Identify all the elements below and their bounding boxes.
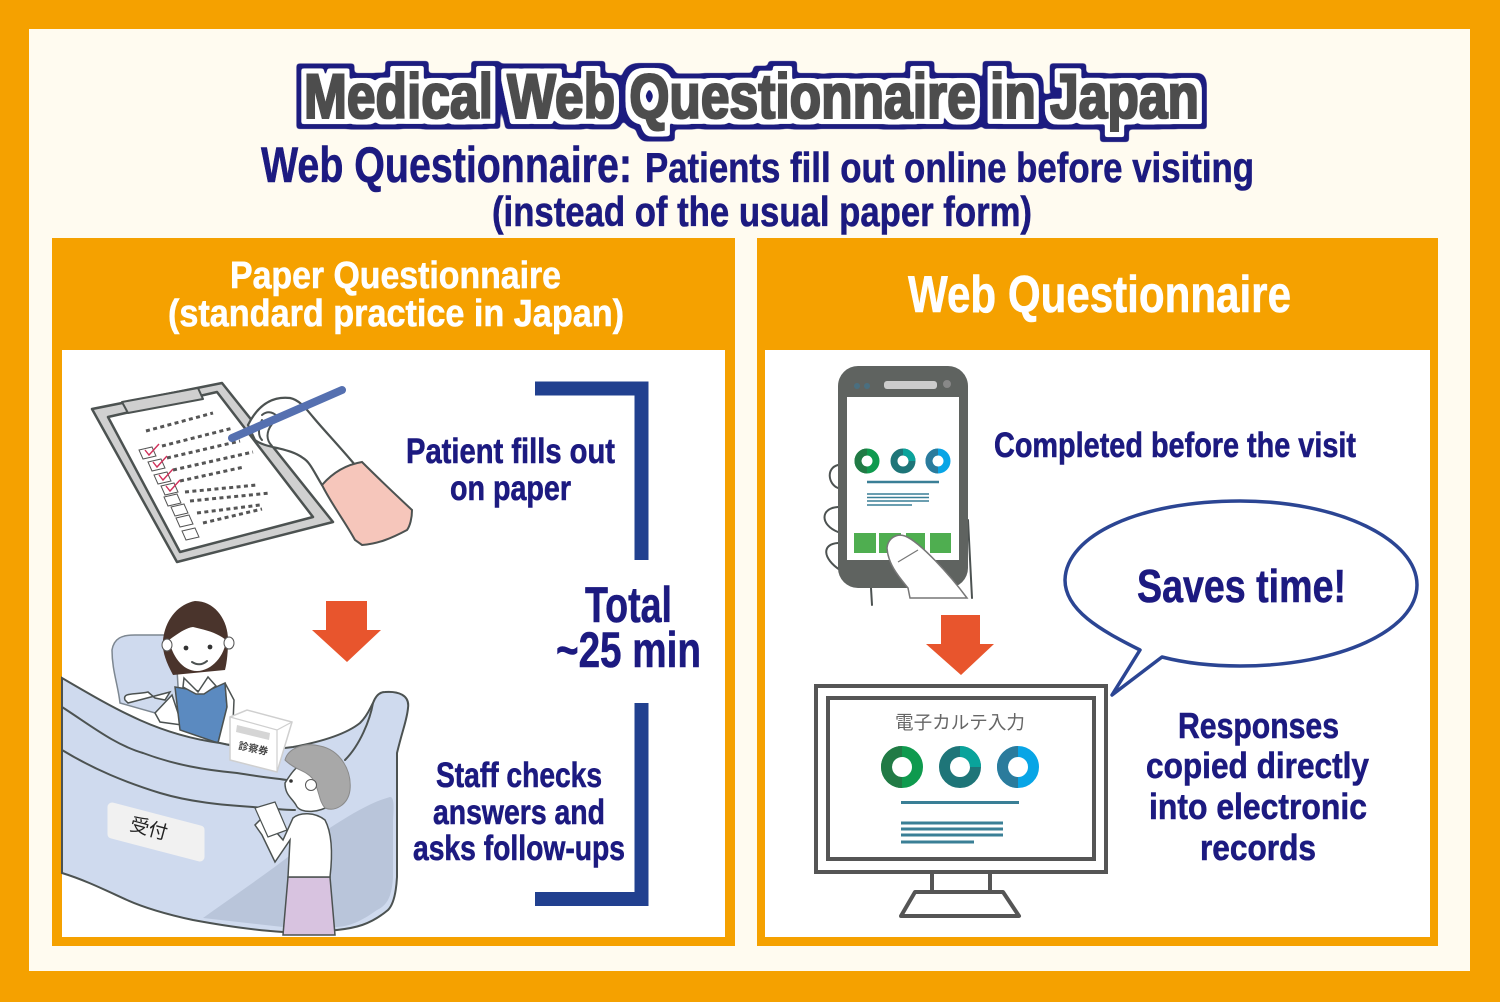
text: responses copied into records: copied directly: [1146, 745, 1369, 786]
subtitle line 2: (instead of the usual paper form): [492, 188, 1032, 235]
icon: reception desk with staff and patient: [62, 601, 408, 935]
counter: [62, 678, 408, 932]
panel: web questionnaire: [757, 238, 1438, 946]
text: responses copied into records: [1146, 705, 1369, 868]
callout: saves time: Saves time!: [1137, 560, 1346, 612]
panel body right: [765, 350, 1430, 937]
icon: smartphone in hand: [824, 366, 972, 605]
text: staff checks answers: [413, 756, 625, 868]
bracket: bottom: [535, 703, 642, 899]
left panel heading: (standard practice in Japan): [168, 293, 624, 335]
ticket box: 診察券: [237, 739, 269, 758]
text: staff checks answers: answers and: [433, 793, 605, 832]
text: responses copied into records: into electronic: [1149, 786, 1367, 827]
right panel heading: Web Questionnaire: [908, 266, 1291, 324]
sign text: 受付: [128, 813, 170, 845]
subtitle lead: Web Questionnaire:: [261, 137, 632, 193]
text: staff checks answers: Staff checks: [436, 756, 602, 795]
panel: paper questionnaire: [52, 238, 735, 946]
subtitle: [261, 137, 1254, 235]
text: total time: ~25 min: [556, 622, 701, 678]
panel frame right: [757, 238, 1438, 946]
left panel heading: Paper Questionnaire: [230, 255, 561, 297]
panel frame left: [52, 238, 735, 946]
text: total time: [556, 577, 701, 678]
callout: saves time: [1065, 501, 1417, 695]
text: patient fills out on paper: [406, 432, 615, 508]
subtitle line 1: Patients fill out online before visiting: [645, 144, 1254, 191]
left panel heading: [168, 255, 624, 335]
icon: computer monitor: [816, 686, 1106, 916]
staff member: [125, 601, 234, 745]
screen heading: 電子カルテ入力: [895, 712, 1025, 733]
text: responses copied into records: records: [1200, 827, 1316, 868]
ticket box: [230, 710, 292, 772]
bracket: top: [535, 388, 642, 560]
patient: [255, 745, 350, 935]
panel body left: [62, 350, 725, 937]
arrow: down, left panel: [312, 601, 381, 662]
text: patient fills out on paper: on paper: [450, 469, 571, 508]
icon: clipboard with hand and pen: [92, 383, 412, 562]
counter shadow: [203, 797, 394, 927]
chair: [112, 635, 180, 720]
text: patient fills out on paper: Patient fills out: [406, 432, 615, 471]
text: completed before the visit: Completed before the visit: [994, 426, 1356, 465]
arrow: down, right panel: [926, 615, 994, 675]
counter sign: [112, 807, 200, 857]
text: total time: Total: [585, 577, 672, 633]
text: staff checks answers: asks follow-ups: [413, 829, 625, 868]
title: Medical Web Questionnaire in Japan: [304, 62, 1199, 132]
text: responses copied into records: Responses: [1178, 705, 1339, 746]
